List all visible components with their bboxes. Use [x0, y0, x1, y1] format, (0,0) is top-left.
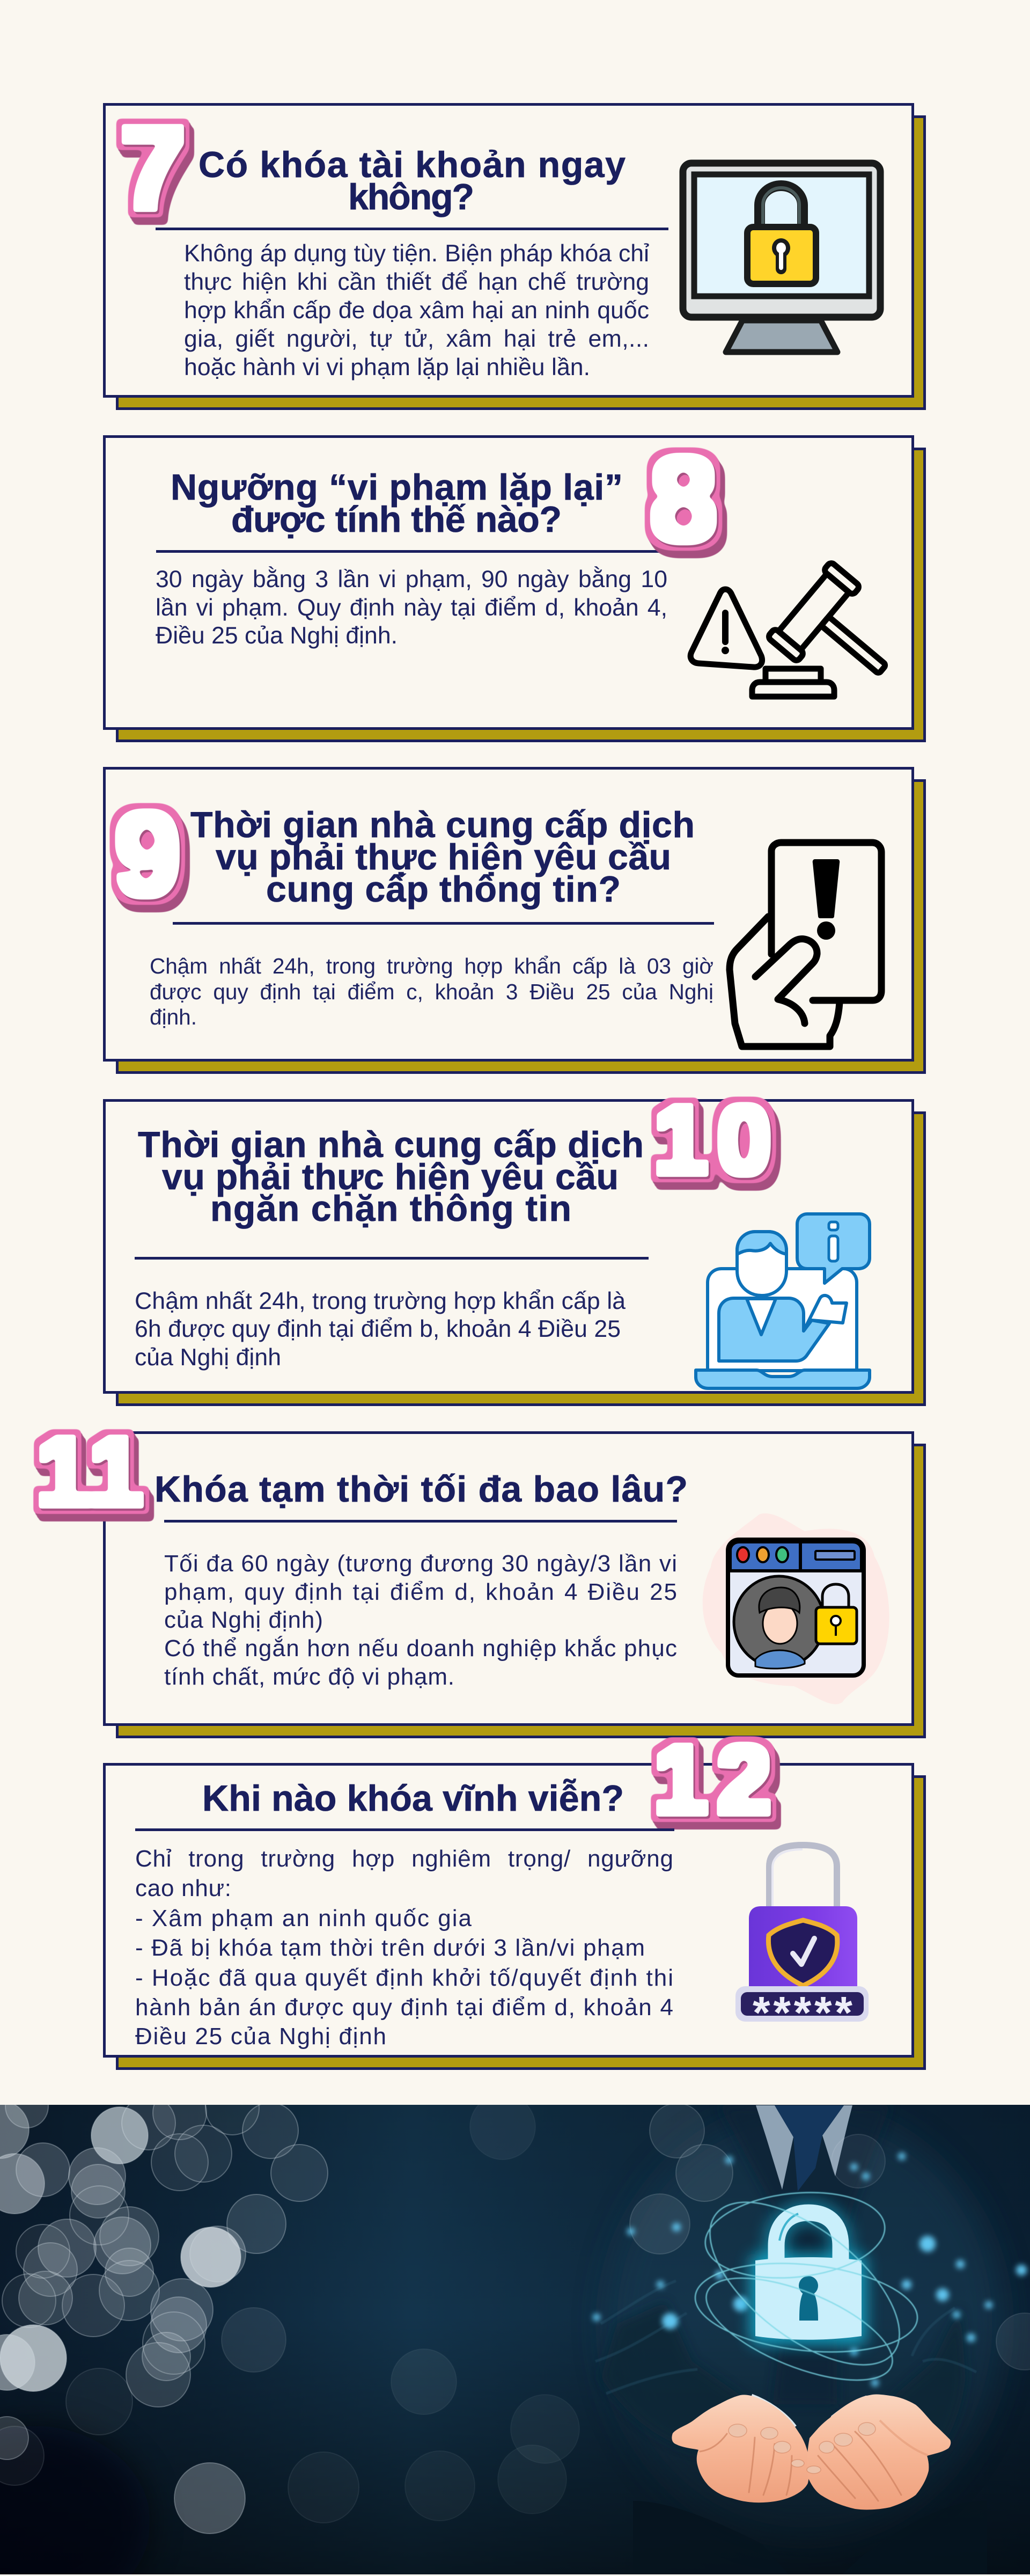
panel 10 rule: [135, 1257, 649, 1260]
icon: monitor with padlock: [683, 163, 880, 352]
panel 9 heading: vụ phải thực hiện yêu cầu: [216, 837, 671, 877]
panel 7 body text: hợp khẩn cấp đe dọa xâm hại an ninh quốc: [184, 297, 649, 324]
panel 10 body text: của Nghị định: [135, 1344, 281, 1371]
panel 11 body text: phạm, quy định tại điểm d, khoản 4 Điều 25: [164, 1579, 677, 1605]
panel 12 body text: - Đã bị khóa tạm thời trên dưới 3 lần/vi phạm: [135, 1935, 645, 1961]
panel 7 number: 7: [120, 103, 186, 233]
panel 12 heading: Khi nào khóa vĩnh viễn?: [202, 1778, 624, 1819]
panel 7 body text: Không áp dụng tùy tiện. Biện pháp khóa chỉ: [184, 240, 649, 267]
panel 12 body text: hành bản án được quy định tại điểm d, khoản 4: [135, 1994, 673, 2021]
photo background: [0, 2105, 1030, 2576]
panel 7 body text: [184, 240, 649, 380]
panel 8 heading: [171, 467, 623, 540]
panel 12 body text: - Xâm phạm an ninh quốc gia: [135, 1905, 472, 1931]
panel 11 number: 11: [36, 1418, 147, 1526]
panel 10 body text: [135, 1288, 626, 1371]
panel 8 body text: [156, 566, 667, 649]
panel 12 body text: [135, 1846, 673, 2050]
panel 10: thời gian ngăn chặn thông tin: [104, 1086, 925, 1405]
panel 8 body text: 30 ngày bằng 3 lần vi phạm, 90 ngày bằng 10: [156, 566, 667, 592]
photo: hands holding a glowing padlock over suit and bokeh: [0, 2081, 1030, 2576]
panel 11 heading: Khóa tạm thời tối đa bao lâu?: [154, 1469, 688, 1510]
panel 11 body text: [164, 1550, 677, 1690]
panel 10 heading: vụ phải thực hiện yêu cầu: [162, 1157, 619, 1197]
panel 9 heading: cung cấp thông tin?: [266, 869, 621, 910]
panel 12 body text: cao như:: [135, 1875, 231, 1901]
panel 12 rule: [135, 1828, 674, 1831]
panel 8 frame: [104, 437, 925, 741]
sparkles: [593, 2153, 1027, 2387]
bokeh circles: [0, 2081, 1030, 2534]
icon: locked profile window: [703, 1513, 889, 1704]
panel 9 body text: được quy định tại điểm c, khoản 3 Điều 25 của Nghị: [150, 979, 713, 1004]
icon: consultant on laptop with info bubble: [696, 1214, 870, 1388]
panel 8 number: 8: [650, 432, 717, 566]
panel 9 heading: Thời gian nhà cung cấp dịch: [190, 804, 695, 845]
panel 9 number: 9: [115, 788, 180, 920]
panel 9 body text: định.: [150, 1005, 197, 1029]
panel 9 heading: [190, 804, 695, 910]
panel 8 body text: lần vi phạm. Quy định này tại điểm d, khoản 4,: [156, 595, 667, 621]
panel 9 body text: [150, 954, 713, 1029]
icon: purple padlock with shield and password: [735, 1845, 869, 2038]
panel 10 heading: ngăn chặn thông tin: [210, 1188, 571, 1229]
panel 8: ngưỡng vi phạm lặp lại: [104, 432, 925, 741]
icon: gavel and warning triangle: [690, 561, 914, 707]
panel 10 heading: Thời gian nhà cung cấp dịch: [138, 1124, 644, 1165]
panel 11: khóa tạm thời tối đa bao lâu: [36, 1418, 925, 1737]
panel 12 body text: Chỉ trong trường hợp nghiêm trọng/ ngưỡng: [135, 1846, 673, 1872]
panel 11 frame: [104, 1433, 925, 1737]
panel 11 body text: Có thể ngắn hơn nếu doanh nghiệp khắc phục: [164, 1635, 677, 1662]
cupped hands: [672, 2394, 951, 2509]
panel 7 frame: [104, 104, 925, 409]
panel 8 rule: [156, 550, 671, 553]
panel 7 rule: [156, 228, 668, 230]
panel 11 body text: Tối đa 60 ngày (tương đương 30 ngày/3 lần vi: [164, 1550, 677, 1577]
panel 7: có khóa tài khoản ngay không: [104, 103, 925, 409]
icon: purple padlock with shield and password: *****: [753, 1987, 852, 2038]
panel 7 heading: [198, 144, 626, 217]
panel 12 body text: Điều 25 của Nghị định: [135, 2023, 386, 2050]
panel 10 body text: Chậm nhất 24h, trong trường hợp khẩn cấp là: [135, 1288, 626, 1314]
panel 10 number: 10: [654, 1086, 781, 1194]
panel 12 number: 12: [654, 1726, 781, 1834]
panel 7 heading: Có khóa tài khoản ngay: [198, 144, 626, 185]
panel 8 body text: Điều 25 của Nghị định.: [156, 623, 398, 649]
panel 11 body text: của Nghị định): [164, 1607, 323, 1633]
panel 10 heading: [138, 1124, 644, 1229]
panel 9 rule: [173, 922, 714, 925]
panel 9 body text: Chậm nhất 24h, trong trường hợp khẩn cấp là 03 giờ: [150, 954, 713, 978]
panel 9: thời gian yêu cầu cung cấp thông tin: [104, 769, 925, 1072]
panel 7 heading: không?: [348, 177, 474, 217]
glowing padlock: [750, 2212, 867, 2345]
panel 11 body text: tính chất, mức độ vi phạm.: [164, 1664, 454, 1690]
panel 12 frame: [104, 1765, 925, 2068]
panel 8 heading: Ngưỡng “vi phạm lặp lại”: [171, 467, 623, 508]
panel 8 heading: được tính thế nào?: [231, 499, 562, 540]
orbit rings: [683, 2172, 926, 2401]
panel 7 body text: thực hiện khi cần thiết để hạn chế trường: [184, 269, 649, 295]
panel 11 rule: [164, 1520, 677, 1523]
panel 7 body text: hoặc hành vi vi phạm lặp lại nhiều lần.: [184, 354, 590, 380]
panel 10 frame: [104, 1100, 925, 1405]
panel 10 body text: 6h được quy định tại điểm b, khoản 4 Điều 25: [135, 1316, 621, 1342]
businessman suit: [595, 2105, 987, 2574]
panel 12 body text: - Hoặc đã qua quyết định khởi tố/quyết định thi: [135, 1965, 673, 1991]
panel 12: khi nào khóa vĩnh viễn: [104, 1726, 925, 2068]
icon: hand holding warning card: [730, 843, 881, 1046]
panel 7 body text: gia, giết người, tự tử, xâm hại trẻ em,...: [184, 326, 649, 352]
panel 9 frame: [104, 769, 925, 1072]
